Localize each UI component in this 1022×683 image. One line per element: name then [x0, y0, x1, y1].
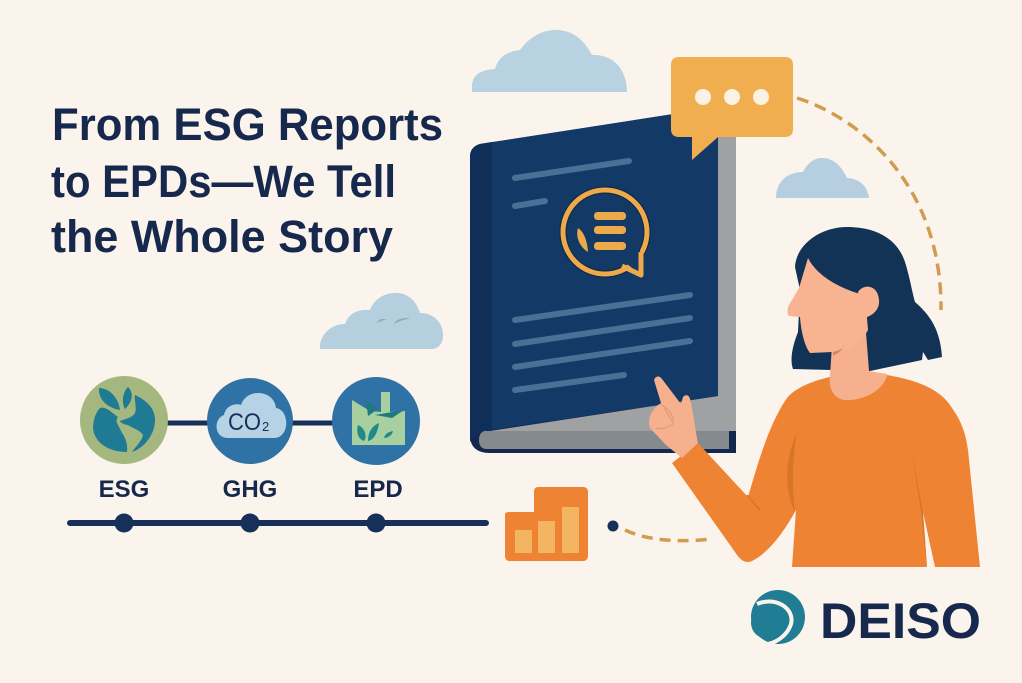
title: From ESG Reports [52, 99, 443, 150]
title: to EPDs—We Tell [51, 156, 396, 207]
timeline [70, 514, 486, 532]
label: GHG: GHG [223, 476, 277, 503]
globe right landmass [120, 395, 155, 452]
ear [858, 287, 879, 318]
logo: DEISO [751, 590, 981, 649]
dot and dashed connector to person [608, 520, 712, 541]
title: the Whole Story [51, 211, 393, 262]
leaf right [123, 387, 132, 409]
book cover [470, 107, 718, 442]
leaf left [99, 388, 120, 410]
hair [792, 227, 942, 371]
icon: GHG CO2 cloud: 2 [262, 419, 269, 434]
cloud: left of book [320, 293, 443, 349]
cover text lines [515, 161, 690, 390]
book back and spine [470, 105, 736, 453]
book [470, 105, 736, 453]
globe left landmass [93, 408, 127, 452]
page bottom [479, 431, 729, 449]
chin shadow [833, 345, 844, 356]
logo mark [751, 590, 805, 644]
sweater side fold [912, 453, 927, 567]
logo wordmark: DEISO [820, 593, 981, 649]
face [788, 258, 868, 353]
cloud: right of book [776, 158, 869, 198]
cloud: top centre [472, 30, 627, 92]
sweater left fold [787, 433, 797, 512]
icon labels [99, 476, 403, 503]
icon: GHG CO2 cloud [207, 378, 293, 464]
icon: ESG globe [80, 376, 168, 464]
dashed connector: speech bubble to person [797, 98, 941, 310]
sweater torso and arm [672, 375, 980, 567]
icon: GHG CO2 cloud: CO [228, 409, 261, 436]
spine shade [470, 142, 492, 442]
cover emblem: chat icon [563, 190, 647, 275]
person [649, 227, 980, 567]
title [51, 99, 443, 262]
icon: bar chart [505, 487, 588, 561]
elbow crease [747, 495, 760, 510]
label: EPD: EPD [353, 476, 403, 503]
connector between icons [165, 420, 340, 426]
neck and collar skin [830, 320, 887, 400]
speech bubble with dots [671, 57, 793, 160]
page edge [490, 130, 736, 431]
label: ESG: ESG [99, 476, 149, 503]
hand [649, 376, 698, 458]
icon: EPD factory leaf [332, 377, 420, 465]
